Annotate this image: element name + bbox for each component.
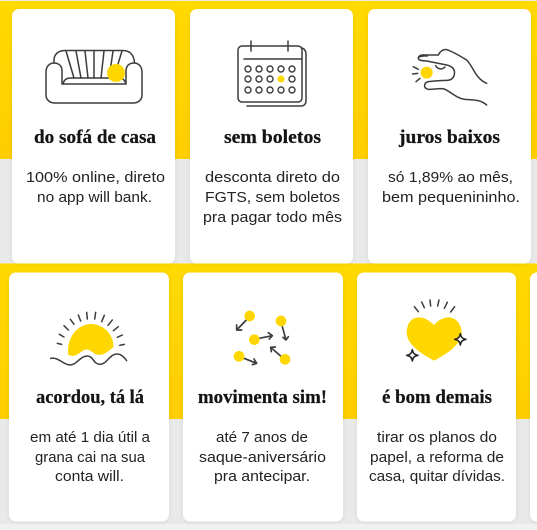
heading: movimenta sim! — [198, 387, 327, 408]
body text — [30, 429, 151, 485]
icon: yellow dots with arrows — [234, 311, 290, 365]
body text: conta will. — [55, 468, 124, 485]
body text: até 7 anos de — [216, 429, 308, 446]
icon: sofa with yellow coin — [46, 50, 142, 103]
heading: acordou, tá lá — [36, 387, 144, 408]
body text: grana cai na sua — [35, 449, 146, 466]
heading: juros baixos — [398, 127, 500, 148]
body text — [199, 429, 326, 485]
body text: bem pequenininho. — [382, 189, 520, 206]
panel: sem boletos — [190, 9, 353, 264]
body text: pra pagar todo mês — [203, 209, 342, 226]
heading: é bom demais — [382, 387, 492, 408]
body text: casa, quitar dívidas. — [369, 468, 505, 485]
heading: sem boletos — [224, 127, 321, 148]
panel: do sofá de casa — [12, 9, 175, 264]
body text: só 1,89% ao mês, — [388, 169, 513, 186]
body text: FGTS, sem boletos — [205, 189, 340, 206]
panel: next card edge — [530, 272, 537, 522]
body text — [203, 169, 342, 226]
icon: fingers pinching a coin — [413, 50, 487, 105]
panel: acordou, tá lá — [9, 272, 169, 522]
body text: em até 1 dia útil a — [30, 429, 151, 446]
body text: 100% online, direto — [26, 169, 165, 186]
panel: movimenta sim! — [183, 272, 343, 522]
body text — [369, 429, 505, 485]
body text: tirar os planos do — [377, 429, 497, 446]
body text: desconta direto do — [205, 169, 340, 186]
body text — [382, 169, 520, 206]
panel: juros baixos — [368, 9, 531, 264]
body text: papel, a reforma de — [370, 449, 504, 466]
icon: shining heart — [407, 300, 466, 361]
icon: sun rising over waves — [51, 312, 127, 365]
body text — [26, 169, 165, 206]
body text: no app will bank. — [37, 189, 152, 206]
panel: é bom demais — [357, 272, 516, 522]
body text: pra antecipar. — [214, 468, 310, 485]
heading: do sofá de casa — [34, 127, 156, 148]
icon: calendar — [238, 41, 306, 106]
body text: saque-aniversário — [199, 449, 326, 466]
